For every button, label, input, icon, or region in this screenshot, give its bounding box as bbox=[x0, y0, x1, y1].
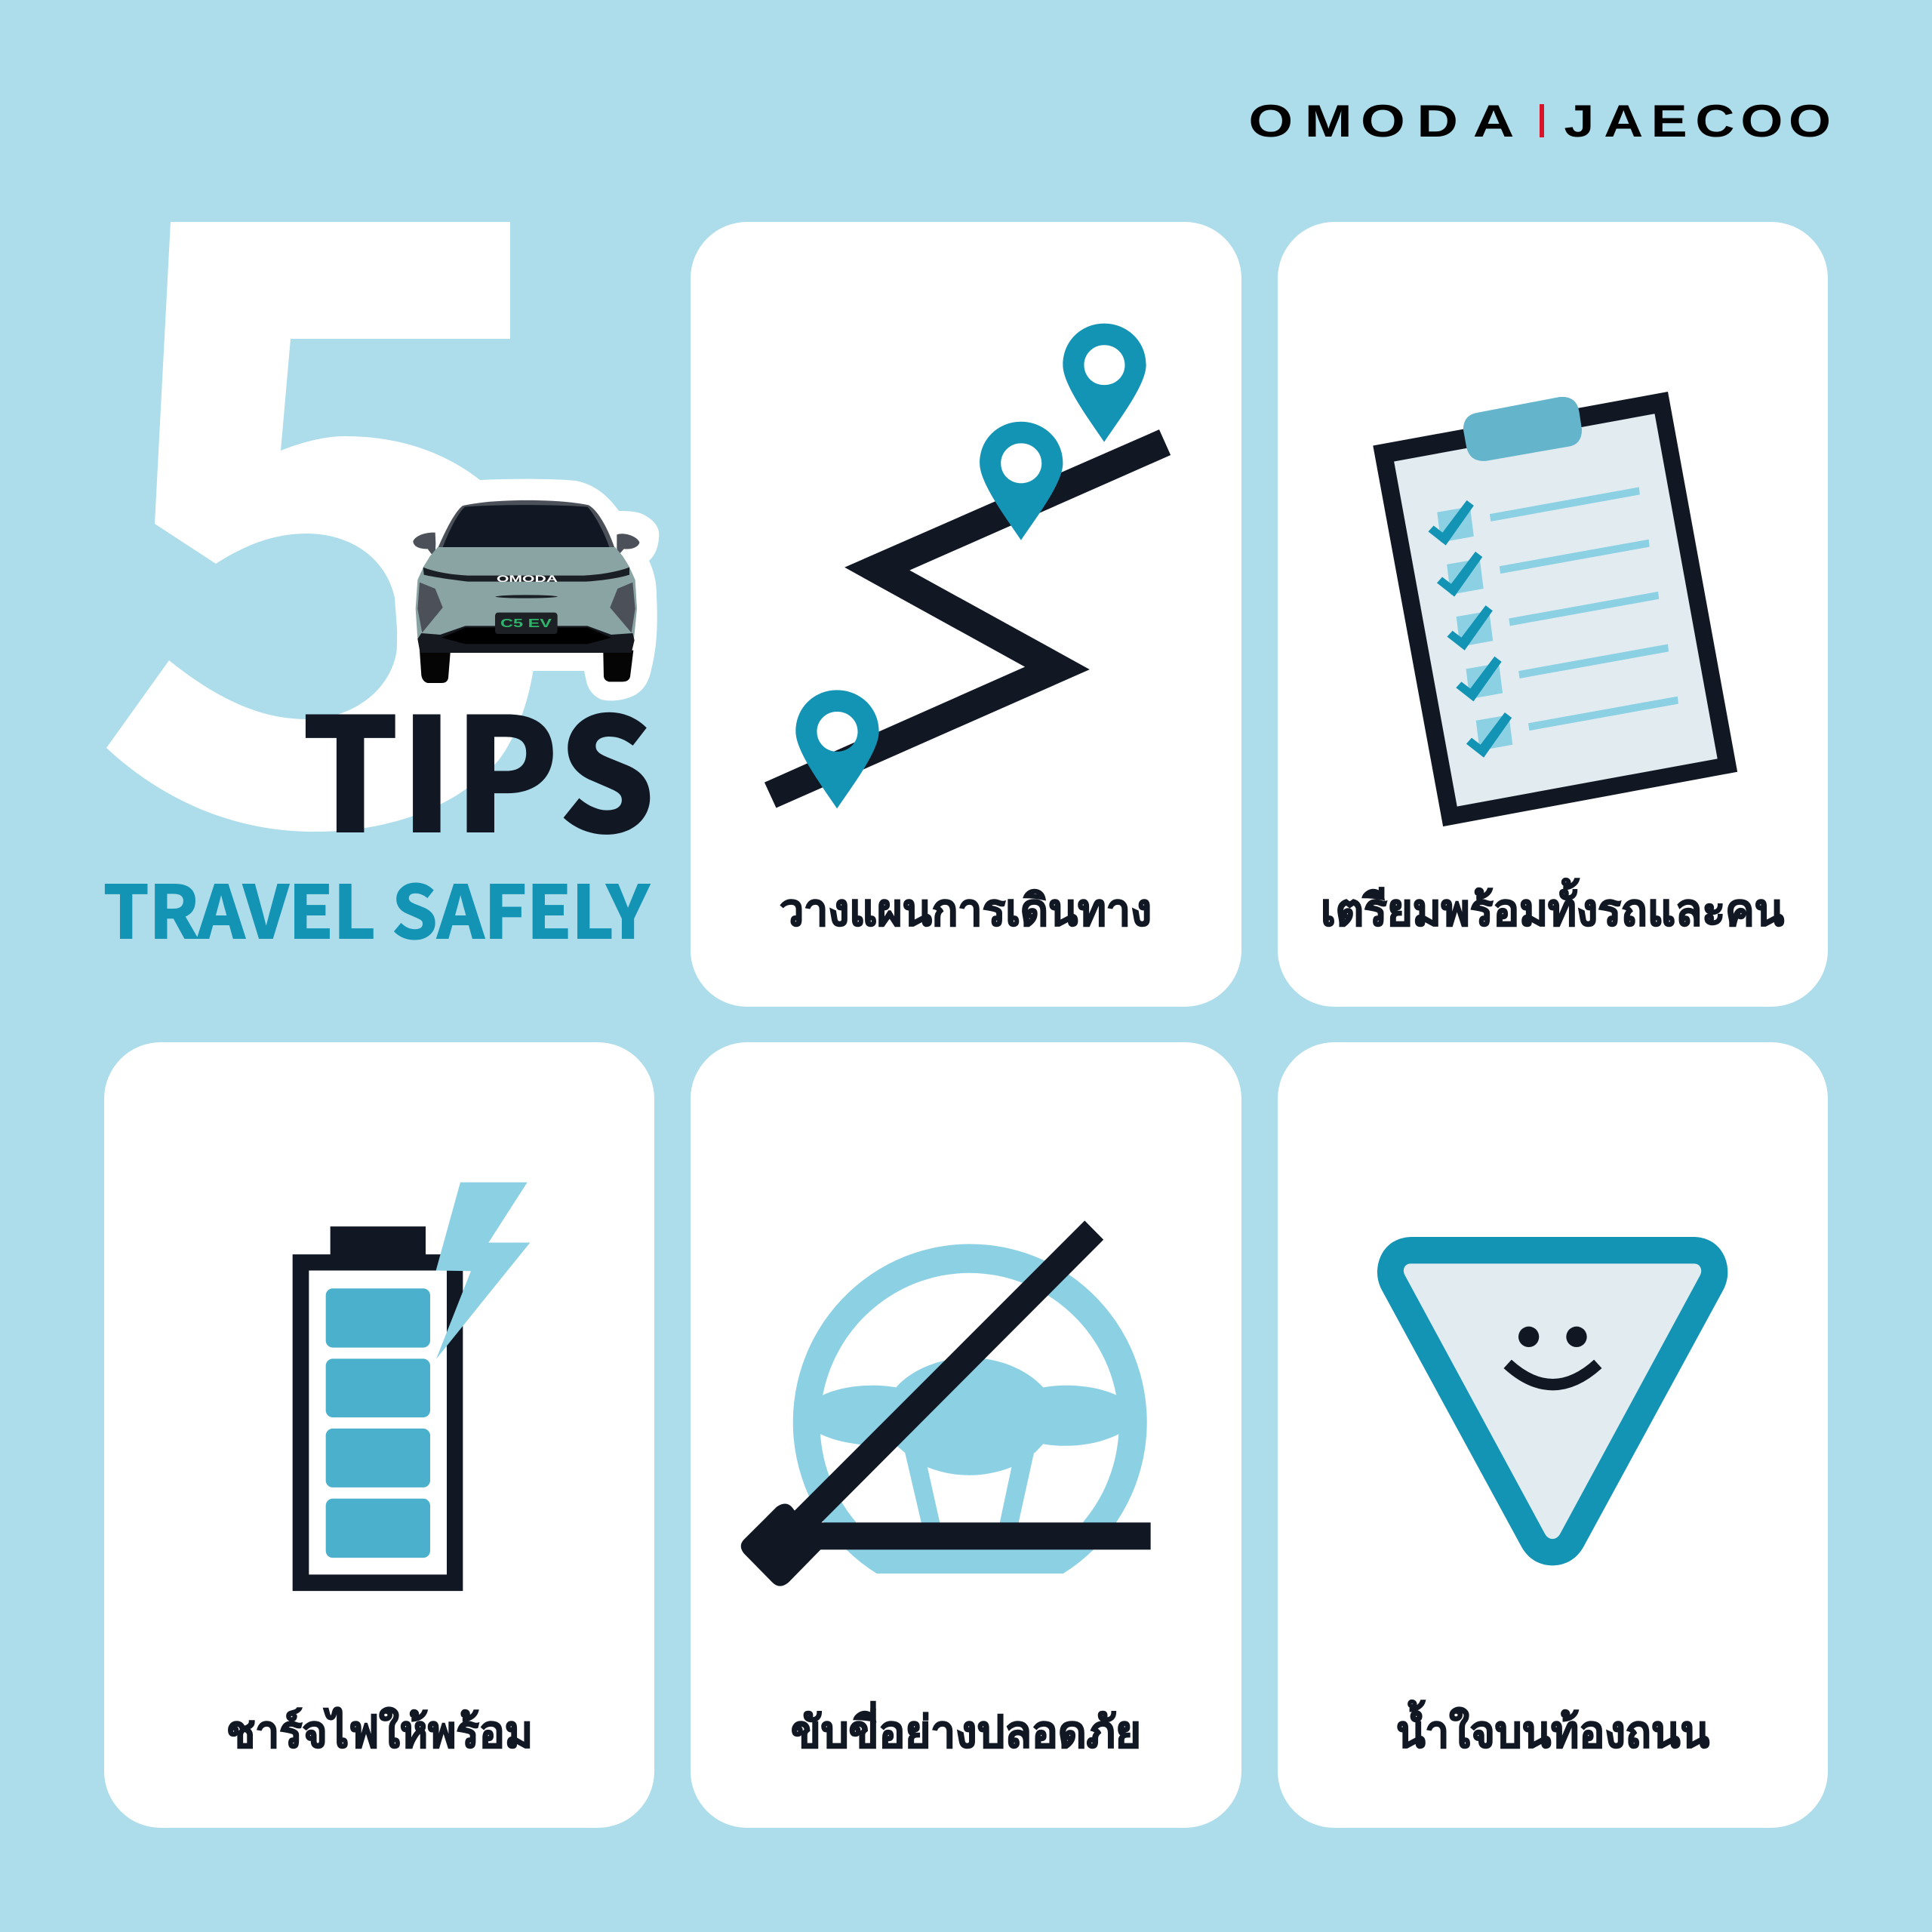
big number 5 bbox=[106, 222, 534, 832]
label: charge the battery: ชาร์จไฟให้พร้อม bbox=[226, 1706, 533, 1757]
label: plan the trip: วางแผนการเดินทาง bbox=[780, 886, 1152, 935]
label: kindness on the road: น้ำใจบนท้องถนน bbox=[1396, 1700, 1709, 1757]
car badge text: OMODA bbox=[497, 574, 558, 584]
brand logo: OMODA | JAECOO: OMODA bbox=[1248, 96, 1514, 146]
icon: clipboard checklist bbox=[1373, 392, 1737, 826]
panel: route planning bbox=[691, 222, 1241, 1007]
car illustration: C5 EV front view bbox=[413, 500, 639, 683]
icon: steering wheel with seat belt bbox=[741, 1220, 1151, 1586]
panel: drive safely bbox=[691, 1042, 1241, 1828]
heading: TIPS: TIPS bbox=[301, 649, 656, 878]
label: drive safely: ขับขี่อย่างปลอดภัย bbox=[791, 1701, 1141, 1757]
icon: yield sign with smile bbox=[1377, 1237, 1727, 1565]
panel: charge bbox=[104, 1042, 654, 1828]
icon: battery with lightning bolt bbox=[293, 1183, 530, 1591]
car sticker halo bbox=[387, 479, 659, 700]
panel: road courtesy bbox=[1278, 1042, 1828, 1828]
brand logo: OMODA | JAECOO bbox=[1248, 96, 1831, 147]
label: prepare car and people: เตรียมพร้อมทั้งรถและคน bbox=[1321, 878, 1784, 935]
subheading: TRAVEL SAFELY: TRAVEL SAFELY bbox=[103, 854, 650, 959]
panel: prepare car and people bbox=[1278, 222, 1828, 1007]
car plate text: C5 EV bbox=[500, 617, 552, 630]
panel: hero 5 tips bbox=[103, 222, 659, 959]
icon: route with map pins bbox=[764, 324, 1171, 808]
brand logo: OMODA | JAECOO: JAECOO bbox=[1564, 97, 1831, 147]
